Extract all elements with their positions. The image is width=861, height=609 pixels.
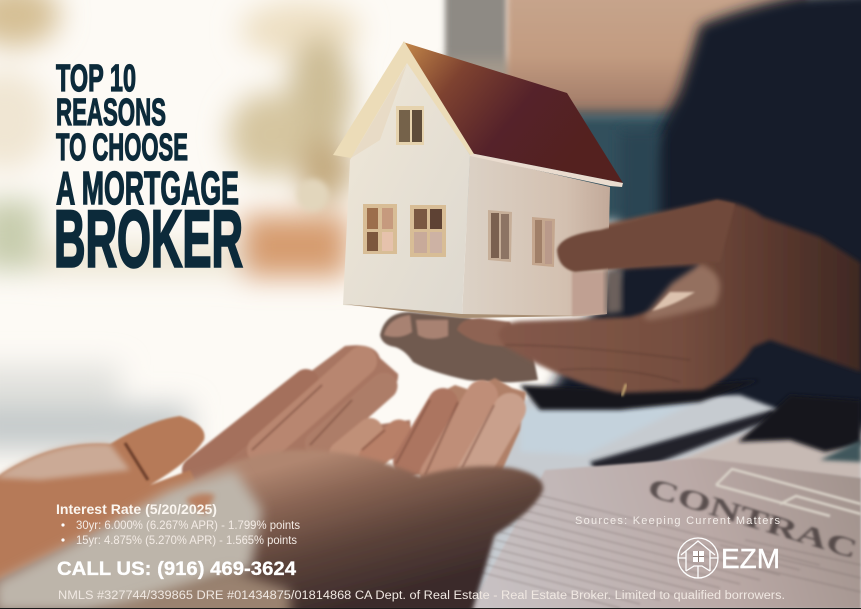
EZM logo (678, 538, 780, 578)
15 year rate: 15yr: 4.875% (5.270% APR) - 1.565% points (76, 533, 297, 547)
model house (333, 41, 623, 318)
blurred sleeve (0, 470, 262, 609)
left palm and thumb (0, 416, 204, 585)
front open hands (0, 345, 543, 609)
right background wall and suit (445, 0, 861, 430)
right hand fingers (395, 378, 526, 475)
title: BROKER (54, 194, 243, 284)
house side wall (462, 155, 610, 316)
contract heading: CONTRAC (644, 473, 861, 565)
ring (622, 384, 626, 396)
lower left window (363, 204, 397, 254)
house front wall (343, 62, 470, 314)
logo wordmark: EZM (721, 543, 780, 574)
fingers under house (380, 312, 538, 382)
clipboard clip (716, 469, 861, 516)
title: A MORTGAGE (56, 162, 239, 214)
title: TOP 10 (56, 58, 136, 100)
index finger on house (557, 200, 735, 272)
back hand holding house (380, 200, 861, 396)
title (54, 58, 243, 284)
palm highlight (643, 264, 720, 320)
title: REASONS (56, 92, 166, 134)
logo icon (678, 538, 718, 578)
30 year rate: 30yr: 6.000% (6.267% APR) - 1.799% points (76, 518, 300, 532)
interest rate block (56, 501, 300, 547)
call to action: CALL US: (916) 469-3624 (57, 559, 296, 580)
sources note: Sources: Keeping Current Matters (575, 515, 780, 527)
licensing footer: NMLS #327744/339865 DRE #01434875/01814868 CA Dept. of Real Estate - Real Estate Broker. Limited to qualified borrowers. (58, 590, 785, 602)
upstairs window (396, 106, 424, 145)
desk and contract paper (445, 380, 861, 609)
lower palm and wrist (498, 200, 861, 393)
title: TO CHOOSE (56, 127, 188, 169)
lower right window (410, 205, 446, 257)
gable trim (333, 41, 474, 158)
left hand fingers (186, 345, 414, 492)
roof (403, 42, 623, 183)
side windows (488, 210, 555, 267)
receiving palm (0, 450, 543, 609)
interest rate block: Interest Rate (5/20/2025) (56, 501, 217, 517)
